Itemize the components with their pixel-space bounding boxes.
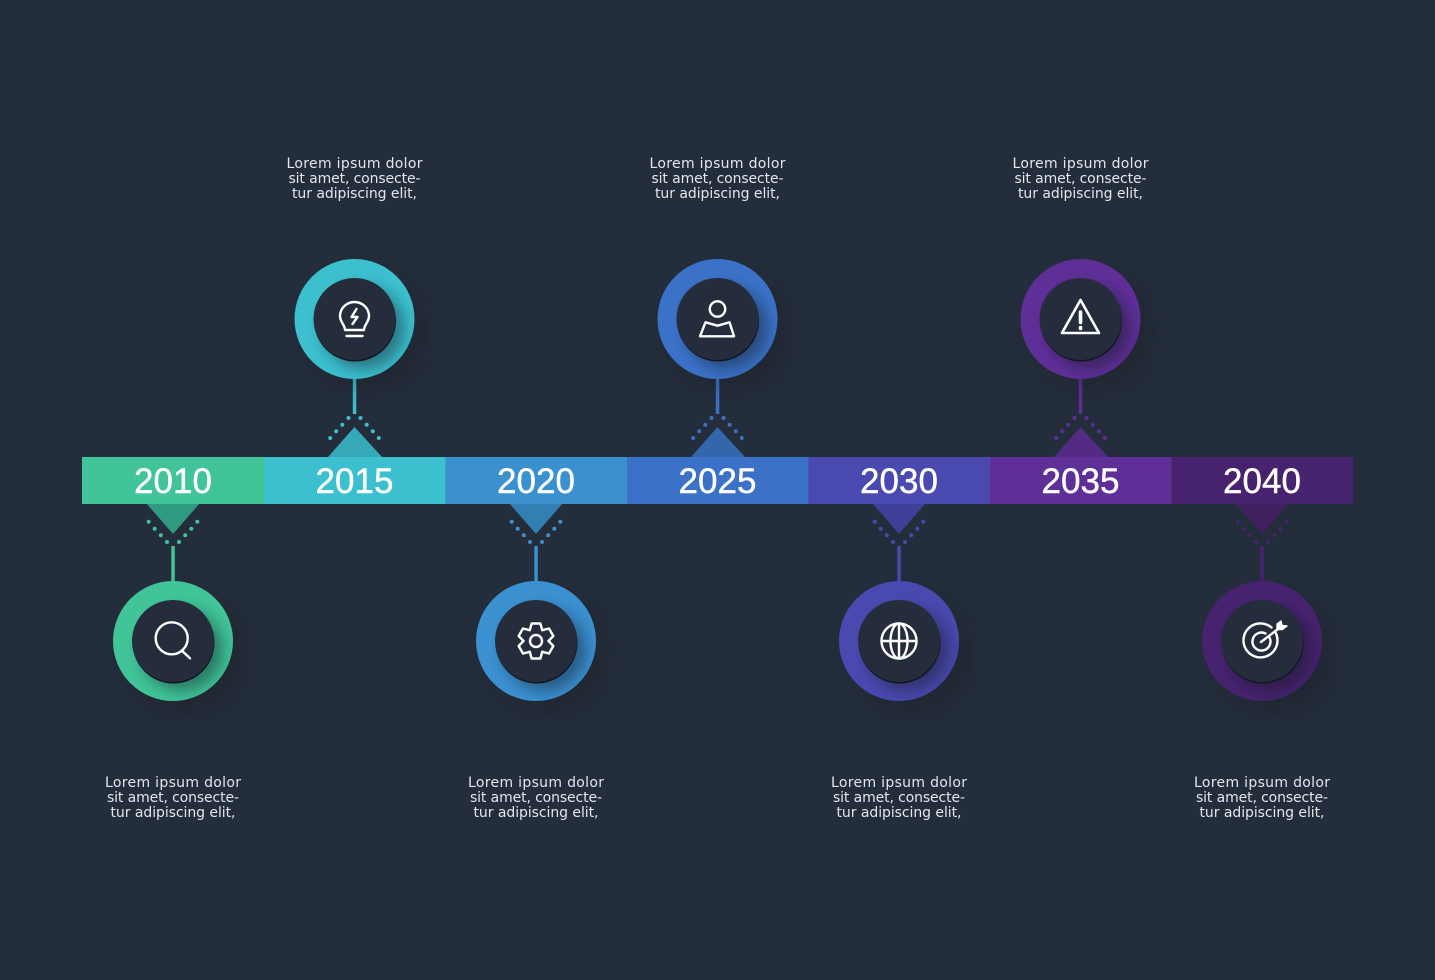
segment 2030: 2030 bbox=[860, 462, 938, 501]
milestone 2030 bbox=[831, 520, 972, 821]
timeline bar bbox=[82, 457, 1353, 504]
description bbox=[1194, 775, 1330, 821]
description: sit amet, consecte- bbox=[1014, 171, 1146, 187]
icon: person on map bbox=[700, 301, 734, 336]
description: Lorem ipsum dolor bbox=[1012, 156, 1149, 172]
icon: globe bbox=[882, 624, 916, 658]
segment 2015: 2015 bbox=[316, 462, 394, 501]
description bbox=[286, 156, 423, 202]
milestone 2020 bbox=[468, 520, 609, 821]
description: sit amet, consecte- bbox=[288, 171, 420, 187]
description bbox=[650, 156, 786, 202]
description: sit amet, consecte- bbox=[107, 790, 239, 806]
circle badge bbox=[658, 259, 790, 392]
description: tur adipiscing elit, bbox=[110, 805, 236, 821]
segment 2030 bbox=[808, 457, 990, 504]
segment 2020: 2020 bbox=[497, 462, 575, 501]
icon: target with arrow bbox=[1243, 621, 1287, 657]
description: tur adipiscing elit, bbox=[474, 805, 598, 821]
segment 2040 bbox=[1172, 457, 1353, 504]
segment 2040: 2040 bbox=[1223, 462, 1301, 501]
segment 2035: 2035 bbox=[1042, 462, 1120, 501]
segment 2020 bbox=[446, 457, 628, 504]
segment 2025: 2025 bbox=[678, 462, 756, 501]
icon: gear bbox=[518, 624, 554, 658]
icon: magnifier bbox=[156, 622, 190, 658]
milestone 2015 bbox=[286, 156, 428, 440]
description bbox=[105, 775, 241, 821]
description: Lorem ipsum dolor bbox=[650, 156, 786, 172]
connector and dots bbox=[691, 379, 744, 440]
milestone 2025 bbox=[650, 156, 790, 440]
description: Lorem ipsum dolor bbox=[468, 775, 604, 791]
circle badge bbox=[1020, 259, 1154, 392]
connector and dots bbox=[510, 520, 562, 582]
description: tur adipiscing elit, bbox=[292, 186, 417, 202]
segment 2025 bbox=[627, 457, 809, 504]
connector and dots bbox=[873, 520, 925, 582]
description: tur adipiscing elit, bbox=[1018, 186, 1143, 202]
segment 2035 bbox=[990, 457, 1172, 504]
segment 2010: 2010 bbox=[134, 462, 212, 501]
description: Lorem ipsum dolor bbox=[831, 775, 967, 791]
connector and dots bbox=[147, 520, 199, 582]
description: Lorem ipsum dolor bbox=[286, 156, 423, 172]
description: sit amet, consecte- bbox=[1196, 790, 1328, 806]
segment 2010 bbox=[82, 457, 265, 504]
description bbox=[1012, 156, 1149, 202]
milestone 2035 bbox=[1012, 156, 1154, 440]
description: sit amet, consecte- bbox=[470, 790, 602, 806]
circle badge bbox=[294, 259, 428, 392]
segment 2015 bbox=[264, 457, 446, 504]
connector and dots bbox=[1236, 520, 1288, 582]
icon: light bulb bbox=[340, 302, 369, 336]
description: tur adipiscing elit, bbox=[655, 186, 780, 202]
pointer triangles bbox=[146, 427, 1289, 534]
description: tur adipiscing elit, bbox=[836, 805, 962, 821]
circle badge bbox=[839, 581, 959, 701]
description bbox=[831, 775, 967, 821]
description: Lorem ipsum dolor bbox=[105, 775, 241, 791]
description: tur adipiscing elit, bbox=[1200, 805, 1324, 821]
connector and dots bbox=[1054, 379, 1107, 440]
milestone 2040 bbox=[1194, 520, 1335, 821]
connector and dots bbox=[328, 379, 381, 440]
icon: warning triangle bbox=[1062, 300, 1099, 333]
milestone 2010 bbox=[105, 520, 246, 821]
circle badge bbox=[113, 581, 233, 701]
description: sit amet, consecte- bbox=[833, 790, 965, 806]
circle badge bbox=[1202, 581, 1322, 701]
circle badge bbox=[476, 581, 596, 701]
description: sit amet, consecte- bbox=[652, 171, 784, 187]
description: Lorem ipsum dolor bbox=[1194, 775, 1330, 791]
description bbox=[468, 775, 604, 821]
